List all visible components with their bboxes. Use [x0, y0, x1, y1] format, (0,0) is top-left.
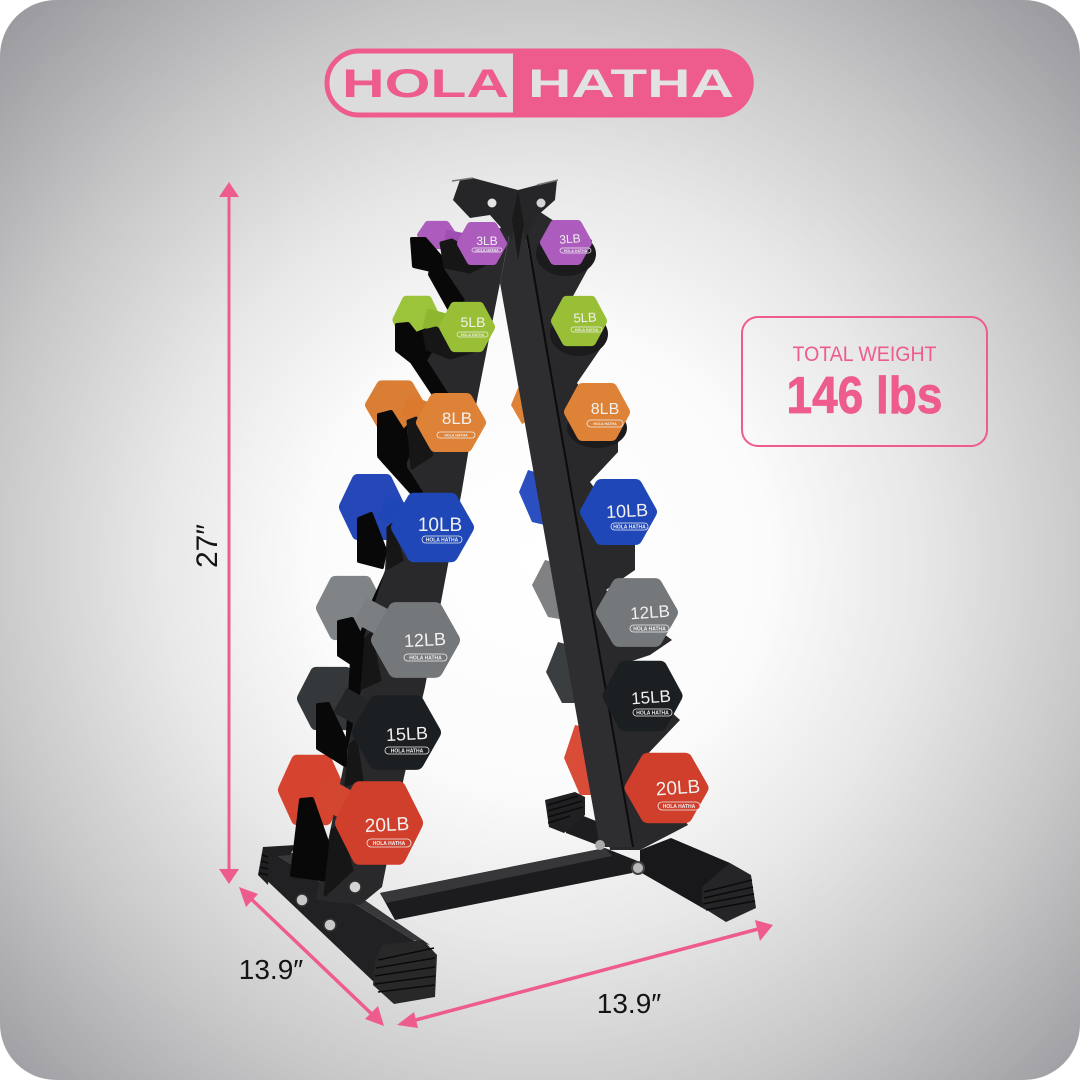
- callout caption: TOTAL WEIGHT: [792, 343, 937, 366]
- dumbbell left 15LB: HOLA HATHA: [391, 748, 424, 754]
- dumbbell right 15LB: 15LB: [631, 687, 672, 708]
- dumbbell right 3LB: 3LB: [559, 231, 581, 247]
- rack front strip: [500, 190, 632, 847]
- dumbbell right 15LB: [610, 668, 675, 724]
- dumbbell left 5LB: [444, 307, 490, 347]
- dumbbell left 8LB: [422, 399, 480, 446]
- dumbbell right 8LB: 8LB: [591, 401, 619, 418]
- dumbbell right 20LB: [632, 760, 701, 816]
- dumbbell right 10LB: 10LB: [606, 500, 649, 522]
- left inner pegs: [325, 240, 490, 895]
- dumbbell left 12LB: HOLA HATHA: [409, 656, 442, 662]
- dumbbell right 5LB: 5LB: [573, 309, 597, 326]
- dumbbell left 12LB: [379, 610, 452, 670]
- right front rubber foot: [702, 863, 756, 922]
- logo pill left: [327, 51, 750, 115]
- dumbbell right 3LB: HOLA HATHA: [564, 249, 588, 253]
- bolts: [296, 894, 308, 906]
- cross bar: [380, 848, 640, 920]
- rear left rubber foot: [258, 845, 296, 885]
- dumbbell right 5LB: HOLA HATHA: [575, 328, 599, 332]
- left dumbbell rear heads: [284, 224, 453, 818]
- dumbbell right 20LB: HOLA HATHA: [663, 804, 696, 810]
- height label: 27″: [191, 524, 224, 568]
- logo: [327, 49, 754, 116]
- dumbbell left 5LB: HOLA HATHA: [461, 333, 485, 337]
- dumbbell left 10LB: 10LB: [418, 515, 462, 536]
- height dimension arrow: [219, 182, 239, 884]
- dumbbell right 15LB: HOLA HATHA: [636, 710, 669, 716]
- depth label: 13.9″: [239, 954, 303, 985]
- width label: 13.9″: [597, 988, 661, 1019]
- dumbbell left 5LB: 5LB: [461, 314, 485, 330]
- depth dimension arrow: [239, 887, 384, 1026]
- dumbbell right 3LB: [545, 225, 591, 260]
- strip fold line: [518, 190, 634, 847]
- dumbbell left 20LB: 20LB: [364, 814, 410, 837]
- dumbbell left 3LB: HOLA HATHA: [475, 248, 499, 252]
- dumbbell right 10LB: HOLA HATHA: [613, 524, 646, 530]
- dumbbell right 8LB: [570, 389, 624, 435]
- dumbbell left 10LB: [398, 500, 467, 555]
- total weight callout: [742, 317, 987, 446]
- rack right panel: [500, 190, 688, 850]
- dumbbell left 12LB: 12LB: [403, 629, 447, 651]
- left rear pegs: [292, 239, 445, 880]
- bolt on left panel: [349, 881, 361, 893]
- logo pill right: [513, 49, 754, 116]
- dumbbell left 20LB: HOLA HATHA: [373, 841, 406, 847]
- bracket bolts: [488, 198, 496, 208]
- dumbbell left 15LB: 15LB: [385, 723, 429, 745]
- right front bar: [640, 838, 730, 910]
- callout value: 146 lbs: [786, 367, 942, 425]
- dumbbell left 3LB: 3LB: [476, 234, 498, 248]
- rack top bracket: [452, 178, 558, 260]
- dumbbell left 20LB: [343, 790, 415, 856]
- left base bar: [259, 853, 437, 983]
- bracket tabs: [452, 178, 558, 185]
- rear right rubber foot: [545, 792, 585, 833]
- dumbbell left 15LB: [360, 703, 433, 762]
- dumbbell left 10LB: HOLA HATHA: [426, 538, 459, 544]
- dumbbell right 10LB: [587, 486, 650, 538]
- bolt washer: [632, 862, 644, 874]
- logo word HATHA: HATHA: [528, 62, 734, 106]
- logo word HOLA: HOLA: [342, 62, 509, 106]
- dumbbell left 3LB: [462, 226, 502, 261]
- dumbbell right 20LB: 20LB: [655, 776, 701, 801]
- dumbbell left 8LB: HOLA HATHA: [444, 434, 468, 438]
- dumbbell right 12LB: 12LB: [630, 602, 671, 623]
- left base bar top: [273, 853, 430, 945]
- dumbbell right 12LB: HOLA HATHA: [633, 626, 666, 632]
- dumbbell left 8LB: 8LB: [442, 409, 472, 428]
- left dumbbell handles: [320, 237, 475, 823]
- right peg holders: [536, 232, 627, 448]
- rear right foot bar: [561, 807, 606, 846]
- right side rear dumbbell heads: [511, 388, 597, 795]
- dumbbell right 12LB: [603, 585, 671, 640]
- rack base rear: [545, 792, 606, 846]
- front rubber foot: [373, 940, 437, 1004]
- rack left base: [258, 845, 437, 1004]
- dumbbell right 8LB: HOLA HATHA: [593, 422, 617, 426]
- width dimension arrow: [397, 920, 773, 1028]
- rack base cross bar and right foot: [380, 838, 756, 922]
- rack left front panel: [316, 220, 512, 905]
- dumbbell right 5LB: [556, 301, 602, 341]
- rack left back panel: [330, 245, 467, 880]
